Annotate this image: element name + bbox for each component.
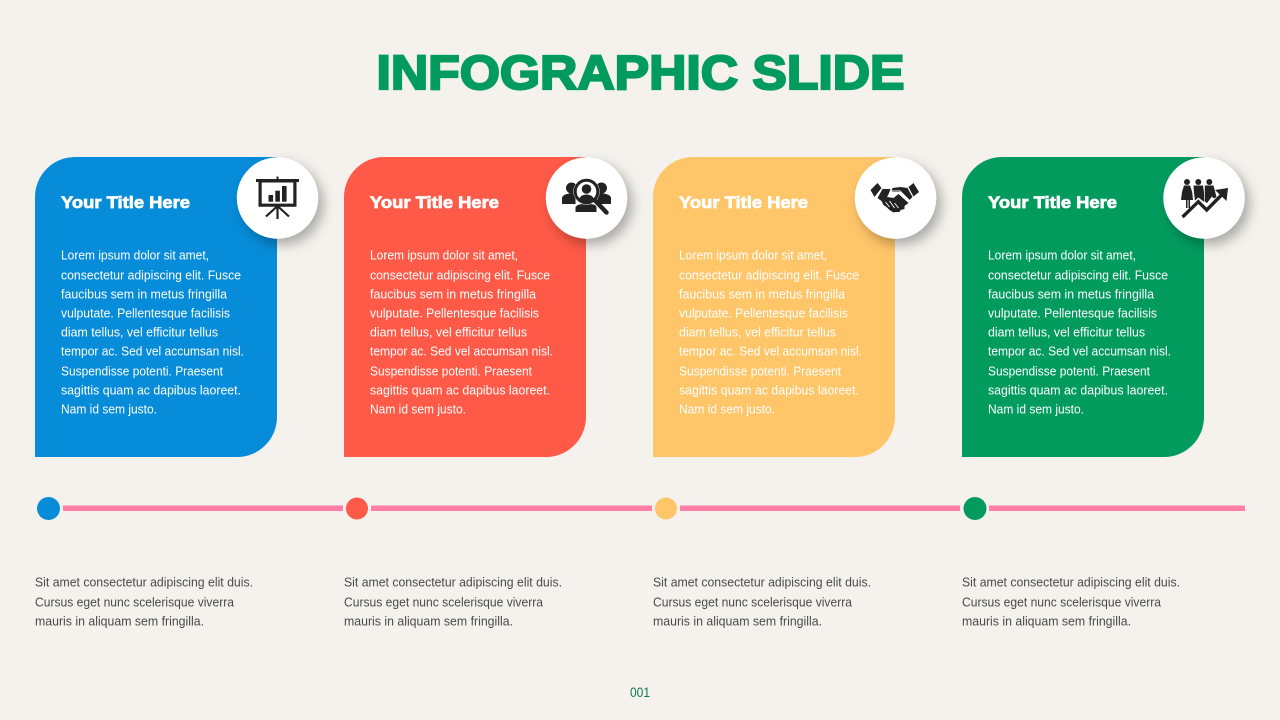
note text 1: Cursus eget nunc scelerisque viverra [35,594,235,610]
card 1 body text: sagittis quam ac dapibus laoreet. [61,382,241,398]
card 2 body text [370,248,553,416]
note text 2: mauris in aliquam sem fringilla. [344,614,513,628]
card 3 body text: Suspendisse potenti. Praesent [679,364,841,378]
note text 3 [653,574,871,628]
timeline connector segments [63,506,1245,511]
note text 4: mauris in aliquam sem fringilla. [962,614,1131,628]
card 4 body text: consectetur adipiscing elit. Fusce [988,268,1168,282]
page number: 001 [630,685,650,700]
note text 3: mauris in aliquam sem fringilla. [653,614,822,628]
note text 2: Cursus eget nunc scelerisque viverra [344,594,544,610]
card 4 body text: tempor ac. Sed vel accumsan nisl. [988,344,1171,358]
card 3 body text: Nam id sem justo. [679,402,775,416]
card 1 body text: consectetur adipiscing elit. Fusce [61,268,241,282]
note text 2 [344,574,562,628]
card 3 body text: faucibus sem in metus fringilla [679,286,846,302]
note text 3: Sit amet consectetur adipiscing elit duis. [653,574,871,590]
card 4 body text: Lorem ipsum dolor sit amet, [988,248,1136,262]
icon: presentation board [237,157,318,239]
panel: card 4 green [962,157,1204,457]
note text 1 [35,574,253,628]
card 3 body text: vulputate. Pellentesque facilisis [679,306,848,320]
card 1 body text [61,248,244,416]
card 1 heading: Your Title Here [61,194,190,212]
card 2 body text: diam tellus, vel efficitur tellus [370,324,527,340]
panel: card 3 yellow [653,157,895,457]
note text 4: Cursus eget nunc scelerisque viverra [962,594,1162,610]
card 3 body text: Lorem ipsum dolor sit amet, [679,248,827,262]
title: INFOGRAPHIC SLIDE [376,47,904,100]
timeline dot 3 [655,498,677,520]
card 1 body text: diam tellus, vel efficitur tellus [61,324,218,340]
card 2 body text: Lorem ipsum dolor sit amet, [370,248,518,262]
card 1 body text: tempor ac. Sed vel accumsan nisl. [61,344,244,358]
card 3 body text: sagittis quam ac dapibus laoreet. [679,382,859,398]
timeline dot 2 [346,498,368,520]
card 3 body text [679,248,862,416]
card 2 body text: vulputate. Pellentesque facilisis [370,306,539,320]
card 4 body text: Suspendisse potenti. Praesent [988,364,1150,378]
card 1 body text: faucibus sem in metus fringilla [61,286,228,302]
card 2 body text: Nam id sem justo. [370,402,466,416]
card 3 body text: consectetur adipiscing elit. Fusce [679,268,859,282]
note text 1: Sit amet consectetur adipiscing elit duis. [35,574,253,590]
card 4 body text: diam tellus, vel efficitur tellus [988,324,1145,340]
card 1 body text: Suspendisse potenti. Praesent [61,364,223,378]
panel: card 2 red [344,157,586,457]
card 3 body text: tempor ac. Sed vel accumsan nisl. [679,344,862,358]
card 4 body text [988,248,1171,416]
timeline dot 4 [964,497,986,520]
panel: card 1 blue [35,157,277,457]
card 2 body text: consectetur adipiscing elit. Fusce [370,268,550,282]
card 4 body text: faucibus sem in metus fringilla [988,286,1155,302]
card 4 body text: sagittis quam ac dapibus laoreet. [988,382,1168,398]
note text 1: mauris in aliquam sem fringilla. [35,614,204,628]
note text 4: Sit amet consectetur adipiscing elit duis. [962,574,1180,590]
icon: handshake [855,157,936,239]
card 4 body text: vulputate. Pellentesque facilisis [988,306,1157,320]
card 3 body text: diam tellus, vel efficitur tellus [679,324,836,340]
note text 4 [962,574,1180,628]
card 3 heading: Your Title Here [679,194,808,212]
card 2 body text: tempor ac. Sed vel accumsan nisl. [370,344,553,358]
note text 3: Cursus eget nunc scelerisque viverra [653,594,853,610]
card 4 heading: Your Title Here [988,194,1117,212]
card 4 body text: Nam id sem justo. [988,402,1084,416]
card 2 body text: Suspendisse potenti. Praesent [370,364,532,378]
card 1 body text: Nam id sem justo. [61,402,157,416]
card 2 body text: faucibus sem in metus fringilla [370,286,537,302]
card 1 body text: vulputate. Pellentesque facilisis [61,306,230,320]
timeline dot 1 [37,497,60,520]
note text 2: Sit amet consectetur adipiscing elit duis. [344,574,562,590]
card 2 heading: Your Title Here [370,194,499,212]
icon: team growth arrow [1163,157,1245,239]
card 1 body text: Lorem ipsum dolor sit amet, [61,248,209,262]
card 2 body text: sagittis quam ac dapibus laoreet. [370,382,550,398]
icon: people search magnifier [546,157,627,239]
